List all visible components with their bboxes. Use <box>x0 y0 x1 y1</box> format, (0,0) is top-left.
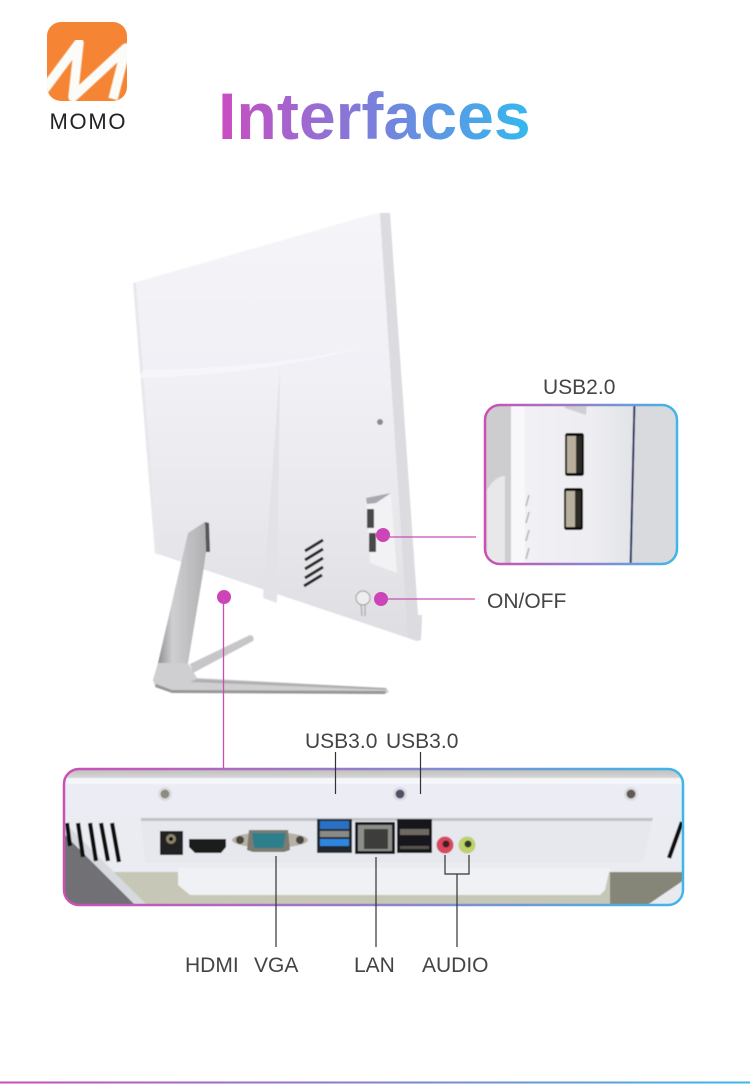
monitor back panel <box>133 213 422 641</box>
USB2.0 port upper <box>565 433 584 476</box>
logo <box>44 22 127 134</box>
monitor USB cutout <box>366 493 397 573</box>
bottom gradient rule <box>0 1082 750 1084</box>
USB2.0 port lower <box>564 488 583 530</box>
panel: rear ports close-up <box>60 765 687 910</box>
VGA port <box>232 830 308 852</box>
monitor vent <box>304 540 323 586</box>
monitor stand <box>153 522 389 694</box>
logo icon: orange M <box>44 22 127 101</box>
screws <box>158 787 638 801</box>
label: USB2.0: USB2.0 <box>543 376 615 399</box>
LAN port <box>355 822 395 854</box>
ports recess <box>141 819 653 863</box>
panel border <box>64 769 683 905</box>
connector line: USB2.0 <box>376 528 476 542</box>
label: USB3.0 right: USB3.0 <box>386 730 458 753</box>
audio jack red <box>436 836 454 854</box>
vents <box>67 822 682 862</box>
logo wordmark: MOMO <box>50 109 127 134</box>
monitor power button <box>356 591 370 616</box>
label: LAN: LAN <box>354 954 395 977</box>
connector line: ON/OFF <box>374 592 475 606</box>
audio jack green <box>458 836 476 854</box>
label: ON/OFF: ON/OFF <box>487 590 566 613</box>
label: AUDIO: AUDIO <box>422 954 489 977</box>
title: Interfaces <box>218 80 531 154</box>
USB3.0 ports <box>317 819 352 853</box>
label: HDMI: HDMI <box>185 954 239 977</box>
panel: USB2.0 close-up <box>480 400 680 570</box>
monitor illustration <box>133 213 422 694</box>
DC power jack <box>160 831 183 855</box>
connector line: stand to rear panel <box>217 590 231 770</box>
HDMI port <box>189 839 226 853</box>
pointer lines: rear ports <box>276 752 469 947</box>
label: USB3.0 left: USB3.0 <box>305 730 377 753</box>
monitor screw hole <box>377 419 383 425</box>
USB black ports <box>397 819 432 853</box>
monitor stand back leg <box>190 635 254 673</box>
label: VGA: VGA <box>254 954 298 977</box>
